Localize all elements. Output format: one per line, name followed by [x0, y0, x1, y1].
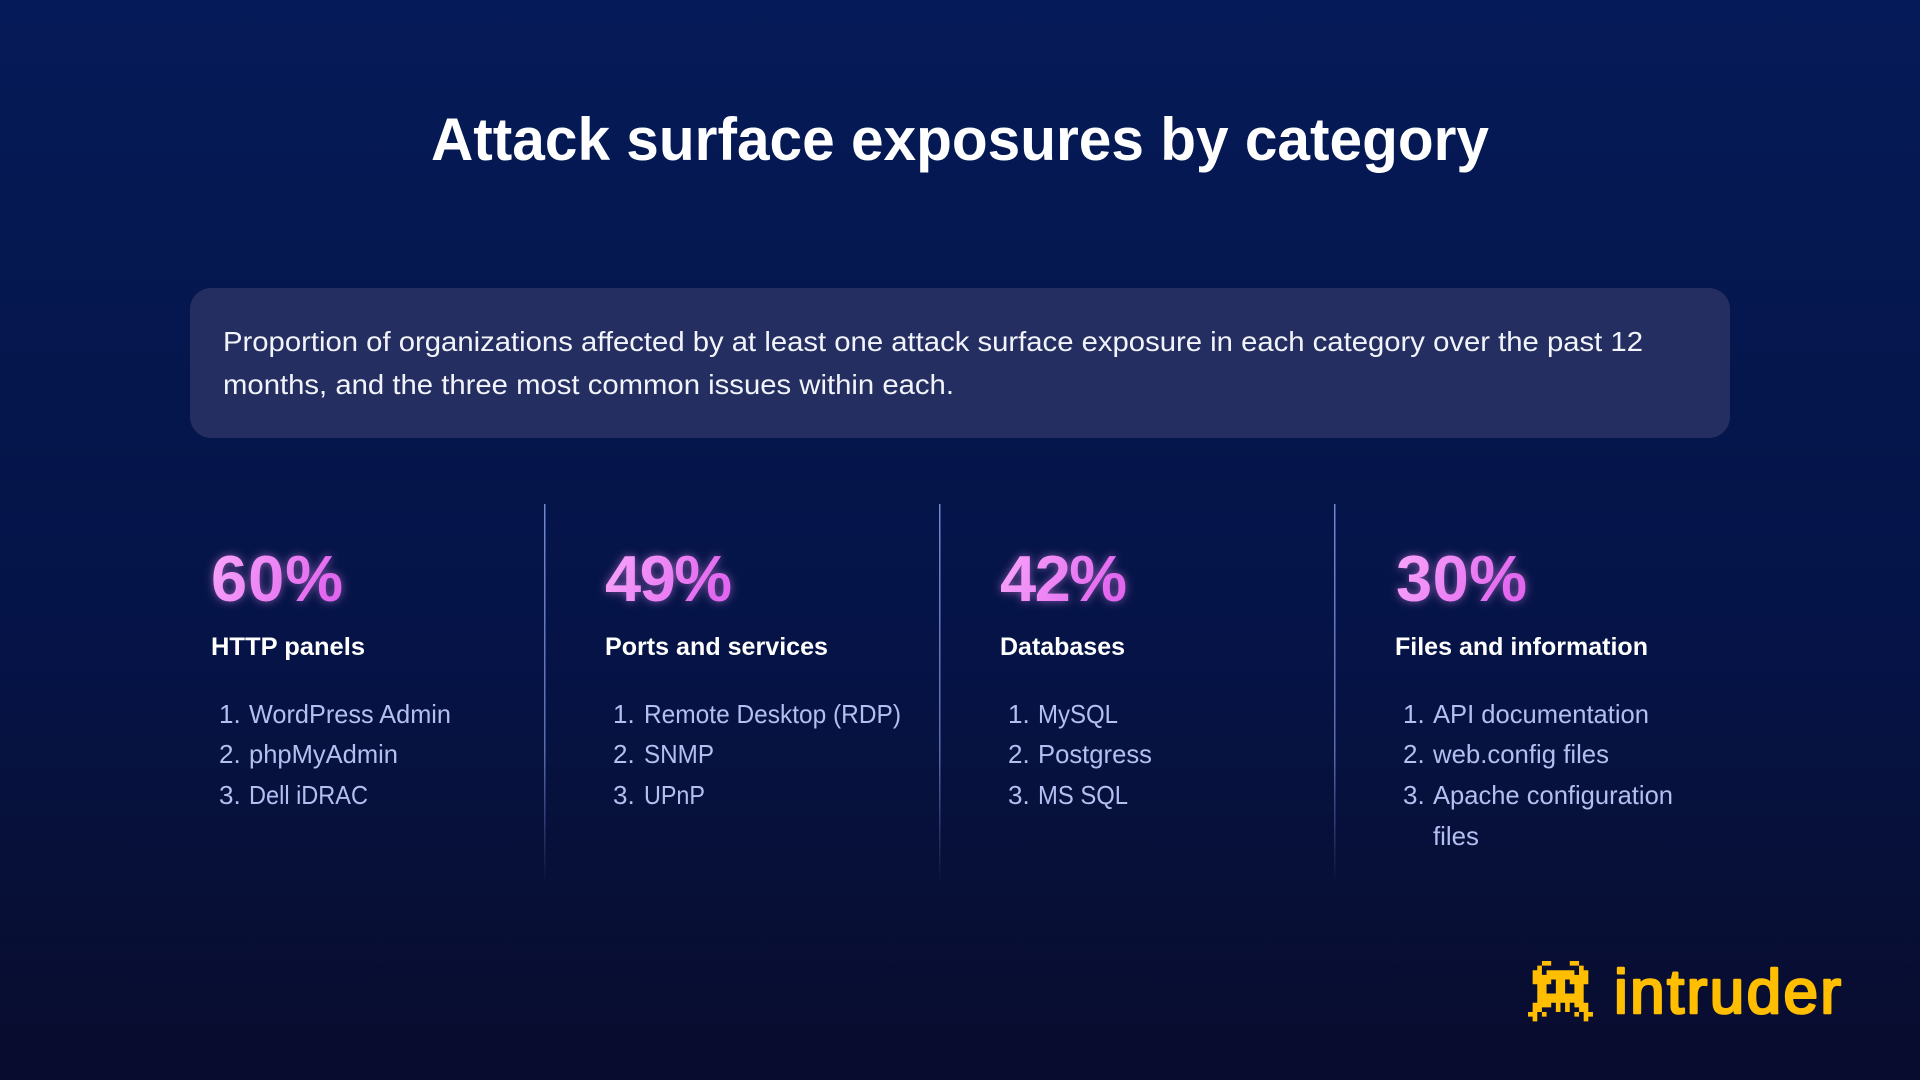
logo: intruder [1528, 958, 1841, 1027]
list: Ports and services issues [613, 699, 901, 810]
list: HTTP panels issues: 3. [219, 780, 241, 810]
list: Ports and services issues: 2. [613, 739, 635, 769]
list: Files and information issues: web.config files [1432, 739, 1609, 769]
stat: 42%: 42% [1000, 542, 1127, 615]
panel: description [190, 288, 1730, 438]
list: Ports and services issues: 3. [613, 780, 635, 810]
list: HTTP panels issues [219, 699, 451, 810]
panel: description: Proportion of organizations affected by at least one attack surface exposure in each category over the past 12 [223, 326, 1643, 357]
list: Files and information issues: files [1433, 821, 1479, 851]
list: HTTP panels issues: WordPress Admin [249, 699, 451, 729]
list: Files and information issues: Apache configuration [1433, 780, 1673, 810]
list: Files and information issues: 3. [1403, 780, 1425, 810]
icon: pixel invader [1528, 961, 1593, 1021]
panel: Ports and services [605, 542, 901, 810]
list: Ports and services issues: UPnP [644, 780, 705, 810]
list: Ports and services issues: Remote Desktop (RDP) [644, 699, 901, 729]
heading: HTTP panels: HTTP panels [211, 633, 365, 661]
list: HTTP panels issues: 1. [219, 699, 241, 729]
list: Files and information issues: 1. [1403, 699, 1425, 729]
list: HTTP panels issues: phpMyAdmin [249, 739, 398, 769]
list: Databases issues [1008, 699, 1152, 810]
heading: Databases: Databases [1000, 633, 1125, 661]
stat: 30%: 30% [1396, 542, 1527, 615]
list: Databases issues: Postgress [1038, 739, 1152, 769]
heading: Ports and services: Ports and services [605, 633, 828, 661]
list: Databases issues: MySQL [1038, 699, 1118, 729]
panel: description: months, and the three most common issues within each. [223, 369, 954, 400]
title: Attack surface exposures by category [431, 106, 1490, 173]
panel: HTTP panels [211, 542, 451, 810]
logo wordmark: intruder [1614, 958, 1841, 1027]
list: Files and information issues: API documentation [1433, 699, 1649, 729]
list: Ports and services issues: SNMP [644, 739, 714, 769]
list: Files and information issues: 2. [1403, 739, 1425, 769]
heading: Files and information: Files and information [1395, 633, 1648, 661]
list: Files and information issues [1403, 699, 1673, 851]
stat: 60%: 60% [211, 542, 343, 615]
list: Ports and services issues: 1. [613, 699, 635, 729]
list: Databases issues: 1. [1008, 699, 1030, 729]
list: HTTP panels issues: Dell iDRAC [249, 780, 368, 810]
list: HTTP panels issues: 2. [219, 739, 241, 769]
stat: 49%: 49% [605, 542, 732, 615]
list: Databases issues: 3. [1008, 780, 1030, 810]
list: Databases issues: 2. [1008, 739, 1030, 769]
list: Databases issues: MS SQL [1038, 780, 1128, 810]
panel: Files and information [1395, 542, 1673, 851]
panel: Databases [1000, 542, 1152, 810]
